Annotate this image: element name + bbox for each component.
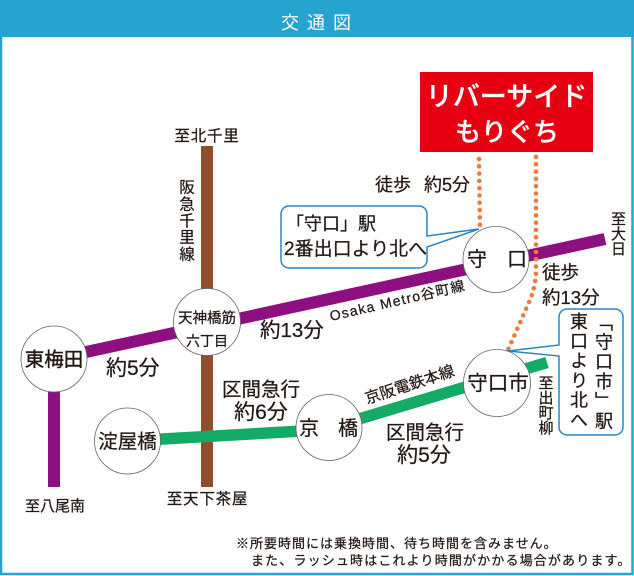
station: Moriguchi: 守 bbox=[467, 248, 487, 271]
station: Moriguchi: 口 bbox=[507, 249, 527, 271]
station: Kyobashi: 橋 bbox=[338, 417, 358, 440]
label: semi-express 5 min bbox=[386, 422, 464, 467]
label: semi-express 6 min: 約6分 bbox=[234, 401, 288, 424]
callout: Moriguchi exit: 2番出口より北へ bbox=[284, 238, 427, 260]
station: Kyobashi bbox=[296, 394, 362, 460]
label: semi-express 5 min: 約5分 bbox=[397, 444, 451, 467]
label: Hankyu Senri Line: 阪急千里線 bbox=[177, 179, 195, 262]
label: walk 5 min: 約5分 bbox=[424, 175, 470, 195]
station: Yodoyabashi bbox=[94, 408, 160, 474]
station: Higashi-Umeda bbox=[21, 326, 87, 392]
callout: Moriguchishi exit: 東口より北へ bbox=[568, 312, 588, 430]
station: Moriguchishi: 守口市 bbox=[467, 372, 529, 395]
label: Osaka Metro Tanimachi Line: Osaka Metro谷町線 bbox=[328, 277, 467, 324]
station: Higashi-Umeda: 東梅田 bbox=[25, 349, 83, 371]
label: 13 min: 約13分 bbox=[260, 319, 324, 342]
line: Hankyu Senri (brown) bbox=[201, 146, 213, 487]
label: semi-express 6 min bbox=[222, 379, 300, 424]
station: Moriguchishi bbox=[464, 350, 530, 416]
label: semi-express 6 min: 区間急行 bbox=[222, 379, 300, 401]
walking route: Moriguchi station bbox=[479, 159, 480, 229]
footnote: また、ラッシュ時はこれより時間がかかる場合があります。 bbox=[251, 553, 632, 568]
station: Tenjimbashisuji 6-chome bbox=[174, 288, 240, 356]
label: Keihan Main Line: 京阪電鉄本線 bbox=[363, 362, 457, 408]
label: to Demachiyanagi: 至出町柳 bbox=[536, 375, 554, 435]
label: 5 min: 約5分 bbox=[106, 357, 160, 380]
label: to Yao-Minami: 至八尾南 bbox=[25, 498, 85, 515]
station: Yodoyabashi: 淀屋橋 bbox=[98, 431, 157, 453]
line: Keihan (green) bbox=[127, 362, 547, 441]
label: to Dainichi: 至大日 bbox=[609, 211, 626, 256]
footnote bbox=[236, 536, 632, 568]
walking route: Moriguchishi station bbox=[508, 157, 536, 350]
station: Tenjimbashisuji 6-chome: 六丁目 bbox=[186, 333, 228, 349]
header bar with title bbox=[0, 0, 634, 37]
footnote: ※所要時間には乗換時間、待ち時間を含みません。 bbox=[236, 536, 558, 551]
station: Kyobashi: 京 bbox=[299, 417, 319, 440]
header bar with title: 交通図 bbox=[281, 13, 359, 33]
label: walk 13 min: 約13分 bbox=[542, 287, 600, 308]
label: walk 13 min bbox=[542, 262, 600, 308]
label: walk 13 min: 徒歩 bbox=[542, 262, 579, 283]
label: to Tengachaya: 至天下茶屋 bbox=[167, 490, 248, 508]
label: walk 5 min: 徒歩 bbox=[375, 175, 411, 195]
station: Tenjimbashisuji 6-chome: 天神橋筋 bbox=[178, 310, 236, 327]
callout: Moriguchi exit bbox=[281, 206, 479, 268]
station: Moriguchi bbox=[463, 226, 529, 292]
callout: Moriguchi exit: 「守口」駅 bbox=[286, 214, 376, 234]
property sign: リバーサイド bbox=[426, 82, 587, 112]
callout: Moriguchishi exit: 「守口市」駅 bbox=[593, 313, 613, 431]
property sign bbox=[420, 72, 593, 152]
label: walk 5 min bbox=[375, 175, 470, 195]
label: semi-express 5 min: 区間急行 bbox=[386, 422, 464, 444]
callout: Moriguchishi exit bbox=[508, 309, 623, 435]
property sign: もりぐち bbox=[455, 117, 559, 147]
label: to Kita-Senri: 至北千里 bbox=[174, 127, 240, 145]
line: Osaka Metro Tanimachi (purple) bbox=[54, 239, 605, 487]
